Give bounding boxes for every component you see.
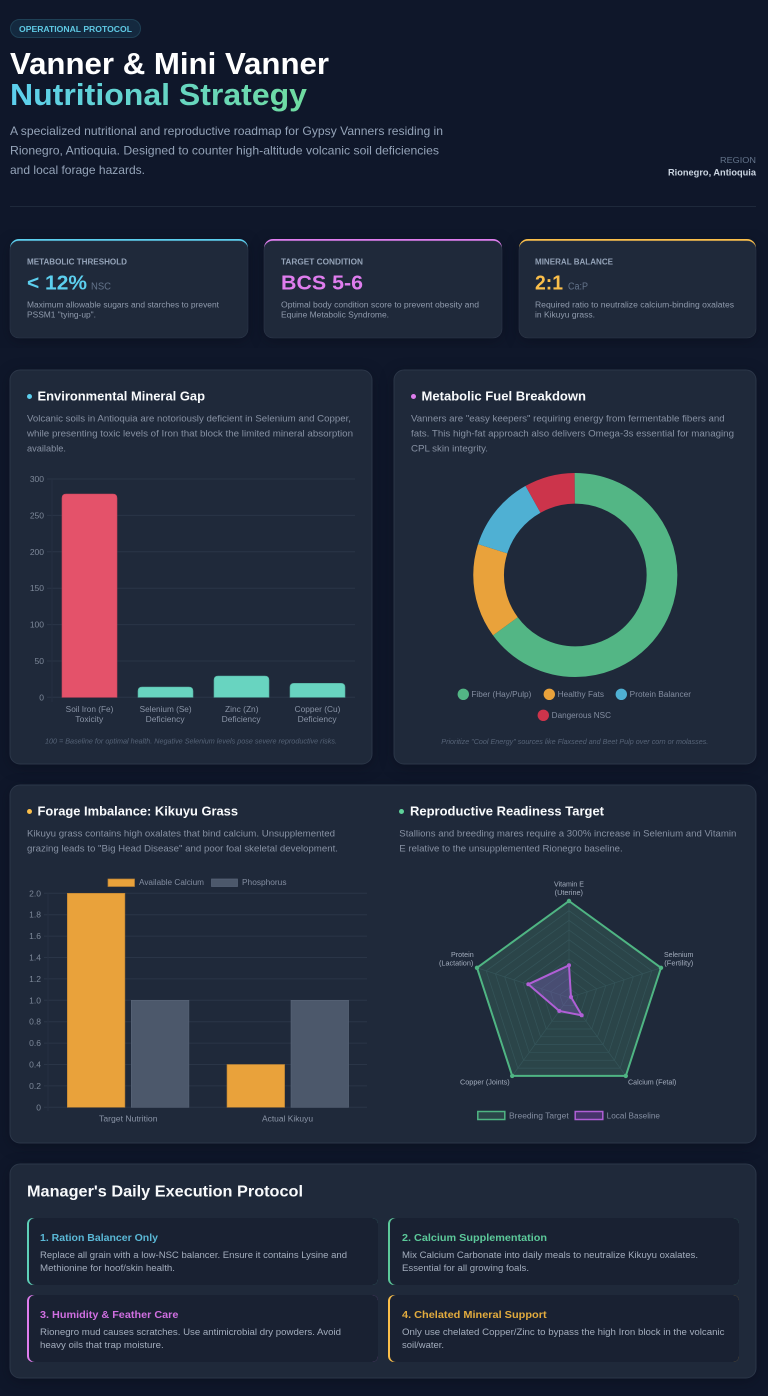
- description: Volcanic soils in Antioquia are notoriously deficient in Selenium and Copper,: [27, 414, 351, 424]
- stat value: [535, 272, 588, 294]
- stat value: Ca:P: [568, 281, 588, 292]
- description: fats. This high-fat approach also delivers Omega-3s essential for managing: [411, 429, 734, 439]
- step 3: Rionegro mud causes scratches. Use antimicrobial dry powders. Avoid: [40, 1327, 341, 1337]
- category labels: Actual Kikuyu: [262, 1115, 313, 1124]
- donut legend: [458, 689, 691, 721]
- stat value: < 12%: [27, 272, 87, 294]
- bars: actual kikuyu: [227, 1000, 349, 1107]
- axis labels: Selenium: [664, 952, 693, 959]
- stat value: [27, 272, 111, 294]
- description: forage imbalance: grazing leads to "Big Head Disease" and poor foal skeletal development.: [27, 844, 338, 854]
- category labels: Target Nutrition: [99, 1115, 158, 1124]
- panel: forage and reproduction: [10, 785, 756, 1143]
- description: while presenting toxic levels of Iron that block the limited mineral absorption: [26, 429, 353, 439]
- intro text: Rionegro, Antioquia. Designed to counter high-altitude volcanic soil deficiencies: [10, 144, 439, 158]
- bar chart: mineral levels: 0: [39, 692, 44, 702]
- heading: reproductive readiness: Reproductive Readiness Target: [410, 804, 605, 819]
- title: Vanner & Mini Vanner: [10, 46, 329, 81]
- category labels: Zinc (Zn): [225, 705, 259, 714]
- grouped bar chart: calcium vs phosphorus: 1.0: [29, 995, 41, 1005]
- axis labels: (Lactation): [439, 960, 473, 967]
- panel: mineral balance: [519, 239, 756, 338]
- bar: selenium: [138, 687, 193, 697]
- heading: Environmental Mineral Gap: [38, 389, 205, 404]
- bar: copper: [290, 683, 345, 697]
- description: reproductive readiness: [399, 829, 736, 854]
- grouped bar chart: calcium vs phosphorus: [29, 878, 367, 1124]
- radar legend: [478, 1111, 661, 1120]
- stat description: Required ratio to neutralize calcium-binding oxalates: [535, 301, 734, 310]
- stat value: 2:1: [535, 272, 563, 294]
- step 3: [27, 1295, 378, 1362]
- stat value: BCS 5-6: [281, 272, 363, 294]
- panel: metabolic threshold: [10, 239, 248, 338]
- radar legend: Local Baseline: [607, 1111, 661, 1120]
- description: forage imbalance: Kikuyu grass contains high oxalates that bind calcium. Unsupplemented: [27, 829, 335, 839]
- axis labels: (Uterine): [555, 890, 583, 897]
- heading: Manager's Daily Execution Protocol: [27, 1184, 303, 1201]
- grouped bar chart: calcium vs phosphorus: 2.0: [29, 888, 41, 898]
- intro text: and local forage hazards.: [10, 163, 145, 177]
- chart legend: Available Calcium: [139, 878, 204, 887]
- step 1: Replace all grain with a low-NSC balancer. Ensure it contains Lysine and: [40, 1250, 347, 1260]
- region label: [668, 156, 757, 178]
- target area: [475, 899, 663, 1078]
- category labels: [99, 1115, 313, 1124]
- axis labels: Protein: [451, 952, 474, 959]
- panel: metabolic threshold: METABOLIC THRESHOLD: [27, 258, 127, 267]
- grouped bar chart: calcium vs phosphorus: 0.8: [29, 1017, 41, 1027]
- step 3: 3. Humidity & Feather Care: [40, 1310, 179, 1321]
- axis labels: (Fertility): [664, 960, 693, 967]
- category labels: [66, 705, 341, 724]
- bar chart: mineral levels: 50: [35, 656, 44, 666]
- category labels: Deficiency: [298, 715, 337, 724]
- step 2: Essential for all growing foals.: [402, 1263, 529, 1273]
- category labels: Deficiency: [146, 715, 185, 724]
- region label: Rionegro, Antioquia: [668, 168, 757, 178]
- stat description: [535, 301, 734, 320]
- grouped bar chart: calcium vs phosphorus: 0.4: [29, 1060, 41, 1070]
- step 3: heavy oils that trap moisture.: [40, 1340, 164, 1350]
- axis labels: Vitamin E: [554, 882, 584, 889]
- intro text: A specialized nutritional and reproductive roadmap for Gypsy Vanners residing in: [10, 124, 443, 138]
- description: reproductive readiness: E relative to the unsupplemented Rionegro baseline.: [399, 844, 623, 854]
- step 2: Mix Calcium Carbonate into daily meals to neutralize Kikuyu oxalates.: [402, 1250, 698, 1260]
- step 4: Only use chelated Copper/Zinc to bypass the high Iron block in the volcanic: [402, 1327, 725, 1337]
- axis labels: Calcium (Fetal): [628, 1080, 676, 1087]
- panel: mineral balance: MINERAL BALANCE: [535, 258, 614, 267]
- bar: zinc: [214, 676, 269, 697]
- stat description: Optimal body condition score to prevent obesity and: [281, 301, 479, 310]
- step 2: 2. Calcium Supplementation: [402, 1233, 547, 1244]
- donut legend: Healthy Fats: [558, 690, 604, 699]
- bar chart: mineral levels: [30, 474, 355, 724]
- step 1: [27, 1218, 378, 1285]
- panel: daily execution protocol: [10, 1164, 756, 1378]
- stat description: PSSM1 "tying-up".: [27, 311, 96, 320]
- radar legend: Breeding Target: [509, 1111, 570, 1120]
- step 4: 4. Chelated Mineral Support: [402, 1310, 547, 1321]
- axis labels: Copper (Joints): [460, 1080, 510, 1087]
- description: Vanners are "easy keepers" requiring energy from fermentable fibers and: [411, 414, 725, 424]
- stat description: Maximum allowable sugars and starches to prevent: [27, 301, 220, 310]
- description: available.: [27, 444, 66, 454]
- category labels: Selenium (Se): [140, 705, 192, 714]
- description: [411, 414, 734, 454]
- category labels: Copper (Cu): [295, 705, 341, 714]
- region label: REGION: [720, 156, 756, 165]
- bar: soil iron: [62, 494, 117, 697]
- chart legend: [108, 878, 286, 887]
- donut legend: Fiber (Hay/Pulp): [471, 690, 532, 699]
- description: [26, 414, 353, 454]
- grouped bar chart: calcium vs phosphorus: 1.6: [29, 931, 41, 941]
- donut legend: Protein Balancer: [630, 690, 691, 699]
- panel: metabolic fuel breakdown: [394, 370, 756, 764]
- grouped bar chart: calcium vs phosphorus: 0: [36, 1102, 41, 1112]
- stat description: in Kikuyu grass.: [535, 311, 595, 320]
- panel: target condition: TARGET CONDITION: [281, 258, 363, 267]
- description: forage imbalance: [27, 829, 338, 854]
- radar chart: [439, 882, 693, 1120]
- axis labels: [439, 882, 693, 1087]
- bars: target nutrition: [67, 893, 189, 1107]
- grouped bar chart: calcium vs phosphorus: 1.8: [29, 910, 41, 920]
- intro text: [10, 124, 443, 177]
- bar chart: mineral levels: 150: [30, 583, 44, 593]
- panel: target condition: [264, 239, 502, 338]
- chart note: 100 = Baseline for optimal health. Negative Selenium levels pose severe reproductive risks.: [45, 739, 337, 746]
- bar chart: mineral levels: 300: [30, 474, 44, 484]
- description: reproductive readiness: Stallions and breeding mares require a 300% increase in Selenium and Vitamin: [399, 829, 736, 839]
- heading: forage imbalance: Forage Imbalance: Kikuyu Grass: [38, 804, 238, 819]
- stat description: [27, 301, 220, 320]
- bar chart: mineral levels: 100: [30, 620, 44, 630]
- step 1: Methionine for hoof/skin health.: [40, 1263, 175, 1273]
- category labels: Soil Iron (Fe): [66, 705, 114, 714]
- category labels: Toxicity: [75, 715, 103, 724]
- step 1: 1. Ration Balancer Only: [40, 1233, 158, 1244]
- heading: Metabolic Fuel Breakdown: [422, 389, 586, 404]
- grouped bar chart: calcium vs phosphorus: 1.2: [29, 974, 41, 984]
- step 2: [388, 1218, 739, 1285]
- step 4: [388, 1295, 739, 1362]
- step 4: soil/water.: [402, 1340, 444, 1350]
- title: Nutritional Strategy: [10, 77, 308, 112]
- donut legend: Dangerous NSC: [552, 711, 611, 720]
- header: [10, 20, 757, 178]
- chart legend: Phosphorus: [242, 878, 286, 887]
- donut chart: [489, 488, 662, 662]
- grouped bar chart: calcium vs phosphorus: 1.4: [29, 952, 41, 962]
- stat value: NSC: [91, 281, 111, 292]
- badge: operational protocol: [10, 20, 140, 38]
- chart note: Prioritize "Cool Energy" sources like Flaxseed and Beet Pulp over corn or molasses.: [441, 739, 708, 746]
- title: [10, 46, 329, 112]
- panel: environmental mineral gap: [10, 370, 372, 764]
- bar chart: mineral levels: 250: [30, 510, 44, 520]
- grouped bar chart: calcium vs phosphorus: 0.2: [29, 1081, 41, 1091]
- category labels: Deficiency: [222, 715, 261, 724]
- grouped bar chart: calcium vs phosphorus: 0.6: [29, 1038, 41, 1048]
- local baseline area: [526, 963, 584, 1017]
- bar chart: mineral levels: 200: [30, 547, 44, 557]
- badge: operational protocol: OPERATIONAL PROTOCOL: [19, 25, 132, 34]
- stat description: [281, 301, 479, 320]
- stat description: Equine Metabolic Syndrome.: [281, 311, 389, 320]
- description: CPL skin integrity.: [411, 444, 488, 454]
